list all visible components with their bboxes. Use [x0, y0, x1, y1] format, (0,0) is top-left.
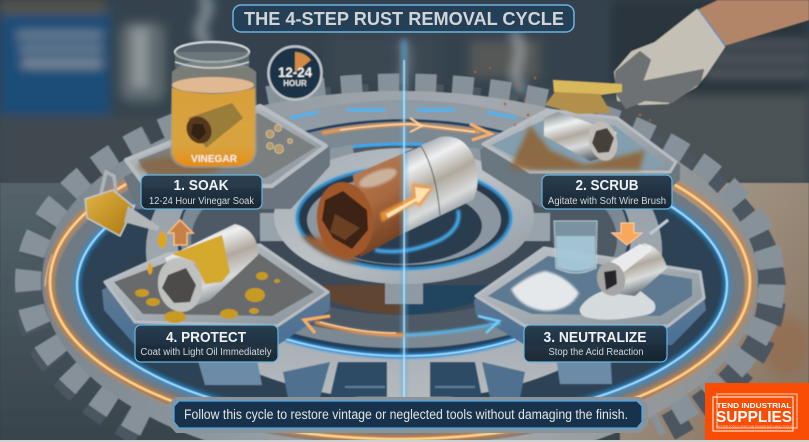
icon: vinegar jar with rusty socket — [170, 42, 292, 168]
inner gear band — [146, 100, 662, 400]
icon: beaker of water — [554, 221, 597, 273]
label: step 4 protect — [135, 325, 278, 362]
logo: Tend Industrial Supplies: SUPPLIES — [716, 409, 792, 426]
icon: baking soda pile — [511, 271, 579, 311]
panel: step 2 plate — [480, 110, 680, 207]
panel: step 4 plate — [102, 245, 330, 385]
background: blurred workshop — [0, 0, 809, 190]
blue glowing outer ring — [77, 145, 727, 425]
icon: 12-24 hour timer — [268, 46, 322, 100]
panel: step 1 plate — [126, 106, 328, 207]
floor: concrete surfaces — [0, 183, 809, 442]
icon: 12-24 hour timer: HOUR — [283, 79, 307, 88]
footer banner — [168, 397, 648, 433]
label: step 2 scrub: Agitate with Soft Wire Brush — [548, 196, 666, 207]
logo: Tend Industrial Supplies — [705, 383, 809, 440]
icon: oil can pouring — [85, 172, 166, 275]
icon: 12-24 hour timer: 12-24 — [278, 64, 312, 80]
label: step 1 soak: 1. SOAK — [174, 178, 229, 194]
label: step 3 neutralize: Stop the Acid Reaction — [548, 347, 644, 358]
central hub gear — [254, 145, 554, 315]
label: step 4 protect: 4. PROTECT — [166, 329, 246, 346]
center socket half rusty half polished — [312, 136, 478, 262]
title: THE 4-STEP RUST REMOVAL CYCLE — [244, 8, 564, 29]
center divider light line — [401, 40, 407, 432]
panel: step 3 plate — [474, 248, 706, 384]
icon: gloved hand holding wire brush — [545, 0, 809, 114]
arrow: soak to scrub top — [322, 118, 491, 140]
blue glow arc and dashes — [285, 110, 516, 356]
rust particles — [474, 67, 651, 126]
center glowing arrow — [380, 183, 433, 222]
label: step 4 protect: Coat with Light Oil Immediately — [140, 347, 272, 358]
label: step 1 soak — [141, 175, 262, 209]
icon: oiled socket — [135, 224, 280, 323]
arrow: scrub to neutralize — [612, 223, 642, 245]
label: step 2 scrub — [542, 175, 672, 209]
arrow: protect to soak — [168, 220, 193, 245]
logo: Tend Industrial Supplies: TEND INDUSTRIAL — [716, 401, 792, 410]
label: step 3 neutralize — [524, 325, 667, 362]
icon: foamy socket and pipette — [580, 220, 668, 320]
large gear base with teeth — [28, 87, 772, 442]
icon: vinegar jar with rusty socket: VINEGAR — [191, 153, 237, 165]
icon: scrubbed socket — [544, 112, 622, 164]
label: step 1 soak: 12-24 Hour Vinegar Soak — [149, 196, 255, 207]
arrow: neutralize to protect — [304, 316, 500, 335]
label: step 3 neutralize: 3. NEUTRALIZE — [544, 329, 646, 346]
orange glowing ring — [50, 125, 750, 439]
steam wisps — [200, 0, 522, 110]
label: step 2 scrub: 2. SCRUB — [576, 178, 638, 194]
footer banner: Follow this cycle to restore vintage or neglected tools without damaging the finish. — [184, 407, 628, 422]
logo: Tend Industrial Supplies: MASTER TOOLS CRAFT AIR POWER AND HAND TOOLS — [716, 424, 792, 428]
